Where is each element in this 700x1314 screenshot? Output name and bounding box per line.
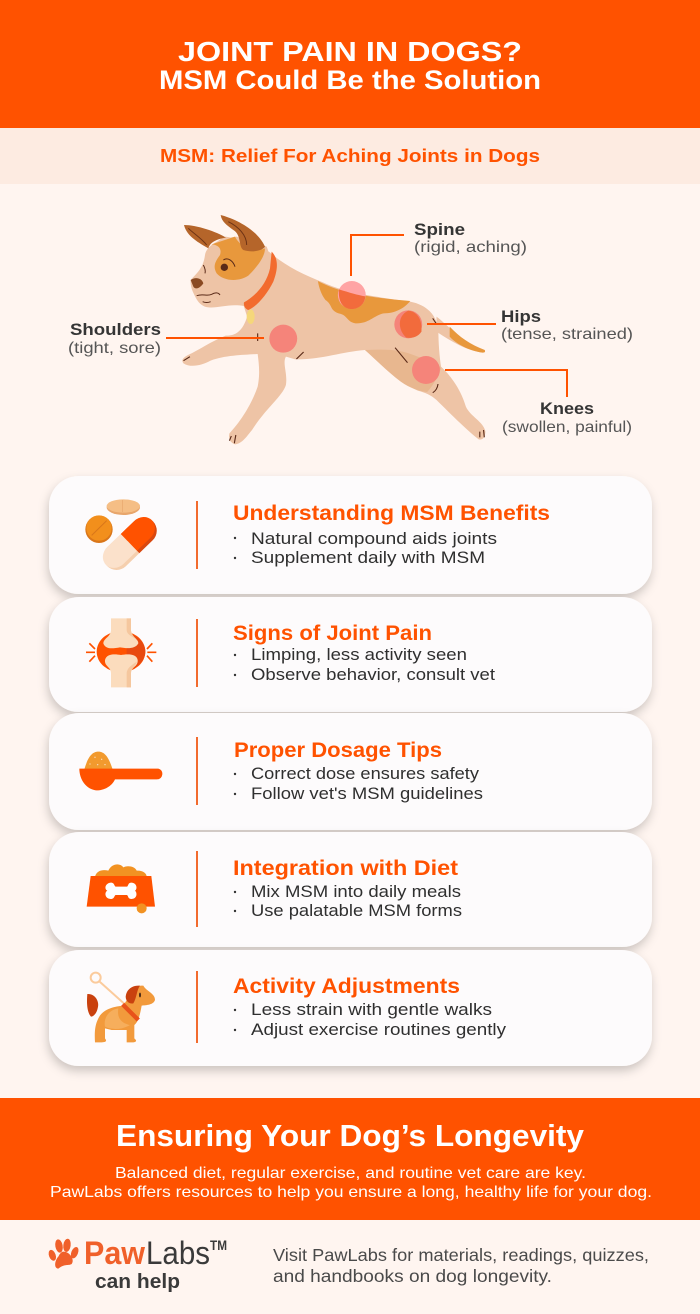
callout: shoulders	[68, 320, 264, 357]
bullet list	[234, 529, 497, 567]
callout: hips	[427, 307, 633, 343]
logo wordmark: Labs	[146, 1235, 210, 1271]
footer text: and handbooks on dog longevity.	[273, 1266, 552, 1286]
joint marker: spine	[338, 281, 366, 309]
card heading: Activity Adjustments	[233, 975, 460, 998]
bullet list: Mix MSM into daily meals	[251, 882, 461, 901]
bullet list	[234, 1000, 507, 1039]
bullet list: Less strain with gentle walks	[251, 1000, 492, 1019]
bullet list	[234, 882, 462, 920]
logo wordmark	[84, 1235, 227, 1271]
bullet list: Use palatable MSM forms	[251, 901, 462, 920]
conclusion text: Balanced diet, regular exercise, and routine vet care are key.	[115, 1165, 586, 1182]
footer text	[273, 1245, 649, 1286]
dog back patch	[318, 281, 410, 323]
card: proper dosage tips	[49, 713, 652, 830]
icon: dog on leash	[87, 973, 155, 1042]
dog illustration	[182, 215, 485, 444]
dog head	[184, 215, 277, 324]
spine label: Spine	[414, 220, 465, 239]
conclusion text: PawLabs offers resources to help you ensure a long, healthy life for your dog.	[50, 1184, 652, 1201]
shoulders label: Shoulders	[70, 320, 161, 339]
joint marker: knees	[412, 356, 440, 384]
logo wordmark: TM	[210, 1237, 227, 1253]
divider	[196, 971, 198, 1043]
conclusion text	[50, 1165, 652, 1201]
dog tail	[436, 317, 485, 353]
footer text: Visit PawLabs for materials, readings, quizzes,	[273, 1245, 649, 1265]
bullet list: Observe behavior, consult vet	[251, 665, 495, 684]
icon: painful joint	[86, 618, 156, 687]
knees symptoms: (swollen, painful)	[502, 419, 632, 436]
bullet list: Follow vet's MSM guidelines	[251, 784, 483, 803]
dog hind leg shade	[365, 350, 441, 392]
card heading: Understanding MSM Benefits	[233, 502, 550, 525]
subtitle: MSM Could Be the Solution	[159, 65, 541, 95]
dog body lines	[183, 318, 484, 443]
divider	[196, 619, 198, 687]
conclusion heading: Ensuring Your Dog’s Longevity	[116, 1118, 585, 1153]
icon: food bowl	[87, 864, 155, 913]
title: JOINT PAIN IN DOGS?	[178, 36, 522, 67]
card: understanding MSM benefits	[49, 476, 652, 594]
bullet list: Adjust exercise routines gently	[251, 1020, 507, 1039]
logo tagline: can help	[95, 1271, 180, 1293]
bullet list: Natural compound aids joints	[251, 529, 497, 548]
hips symptoms: (tense, strained)	[501, 326, 633, 343]
icon: pills	[85, 499, 162, 575]
bullet list	[234, 645, 495, 684]
header banner	[0, 0, 700, 128]
footer	[47, 1235, 649, 1293]
hips label: Hips	[501, 307, 541, 326]
bullet list: Correct dose ensures safety	[251, 764, 480, 783]
card heading: Integration with Diet	[233, 857, 458, 880]
card heading: Proper Dosage Tips	[234, 739, 442, 762]
card: activity adjustments	[49, 950, 652, 1066]
dog body	[182, 237, 485, 444]
knees label: Knees	[540, 399, 594, 418]
section heading: MSM: Relief For Aching Joints in Dogs	[160, 145, 540, 166]
card heading: Signs of Joint Pain	[233, 622, 432, 645]
logo wordmark: Paw	[84, 1235, 145, 1271]
joint marker: hips	[394, 310, 422, 338]
spine symptoms: (rigid, aching)	[414, 239, 527, 256]
shoulders symptoms: (tight, sore)	[68, 340, 161, 357]
bullet list: Supplement daily with MSM	[251, 548, 485, 567]
divider	[196, 501, 198, 569]
dog torso and legs	[182, 237, 485, 444]
divider	[196, 737, 198, 805]
divider	[196, 851, 198, 927]
icon: paw	[47, 1238, 80, 1269]
bullet list	[234, 764, 483, 803]
icon: measuring scoop	[79, 752, 162, 790]
section heading band	[0, 128, 700, 184]
bullet list: Limping, less activity seen	[251, 645, 467, 664]
callout: spine	[351, 220, 527, 276]
conclusion banner	[0, 1098, 700, 1220]
callout: knees	[445, 370, 632, 436]
card: integration with diet	[49, 832, 652, 947]
card: signs of joint pain	[49, 597, 652, 712]
joint marker: shoulders	[269, 325, 297, 353]
